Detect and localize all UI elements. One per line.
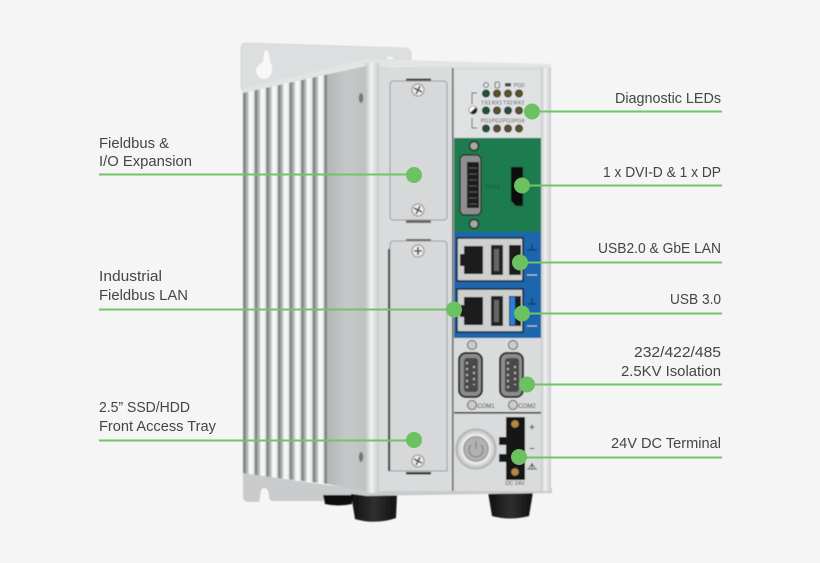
callout: DVI-D and DP: 1 x DVI-D & 1 x DP xyxy=(603,165,721,181)
LED labels: PG3 xyxy=(503,118,513,124)
callout: 232/422/485 isolation: 2.5KV Isolation xyxy=(621,364,721,380)
LED labels: TX1 xyxy=(481,100,491,106)
callout: USB2.0 and GbE LAN xyxy=(512,241,722,270)
serial COM panel: COM1 xyxy=(477,404,495,410)
power button xyxy=(456,429,496,469)
callout: SSD/HDD Front Access Tray: 2.5” SSD/HDD xyxy=(99,400,190,416)
top edge xyxy=(243,59,551,93)
LED labels: PG2 xyxy=(492,118,502,124)
right edge strip xyxy=(541,68,551,491)
DVI and DP panel: DVI-I xyxy=(485,184,500,191)
front foot right xyxy=(488,492,533,518)
rear foot xyxy=(323,495,352,506)
callout: Industrial Fieldbus LAN: Fieldbus LAN xyxy=(99,288,188,304)
bottom mounting tab xyxy=(243,474,366,502)
LEDs xyxy=(482,90,522,132)
callout: SSD/HDD Front Access Tray xyxy=(99,400,422,448)
callout: Fieldbus and I/O Expansion: I/O Expansion xyxy=(99,154,192,170)
LED panel xyxy=(454,70,541,137)
heat sink fins xyxy=(243,74,328,484)
callout: 232/422/485 isolation xyxy=(519,345,722,392)
LAN and USB panel xyxy=(454,232,541,338)
side panel xyxy=(328,62,366,492)
callout: Fieldbus and I/O Expansion: Fieldbus & xyxy=(99,136,169,152)
panel divider xyxy=(454,412,541,414)
callout: DVI-D and DP xyxy=(514,165,722,194)
callout: Industrial Fieldbus LAN xyxy=(99,269,462,318)
callout: Diagnostic LEDs xyxy=(524,91,722,120)
callout: 24V DC Terminal: 24V DC Terminal xyxy=(611,436,721,452)
DVI connector xyxy=(460,155,481,215)
side screw top xyxy=(359,93,363,103)
power and terminal panel: + xyxy=(529,422,535,432)
front corner xyxy=(366,63,379,493)
COM1 connector xyxy=(459,353,482,397)
callout: Fieldbus and I/O Expansion xyxy=(99,136,422,183)
callout: USB 3.0: USB 3.0 xyxy=(670,292,721,308)
panel icons xyxy=(527,244,537,304)
callout: 232/422/485 isolation: 232/422/485 xyxy=(634,345,721,361)
callout: 24V DC Terminal xyxy=(511,436,722,465)
LED labels: PG0 xyxy=(514,83,524,89)
callout: USB2.0 and GbE LAN: USB2.0 & GbE LAN xyxy=(598,241,721,257)
LED labels: TX2 xyxy=(503,100,513,106)
side screw bottom xyxy=(359,452,363,462)
LED labels: PG4 xyxy=(514,118,524,124)
DP port xyxy=(511,167,523,206)
mounting bracket xyxy=(241,43,411,92)
serial COM panel: COM2 xyxy=(518,404,536,410)
bracket and mode icon xyxy=(469,93,477,128)
DC terminal xyxy=(499,417,525,480)
power and terminal panel: DC 24V xyxy=(505,481,525,487)
DVI and DP panel xyxy=(454,138,541,232)
device: industrial computer xyxy=(241,43,552,522)
bottom edge xyxy=(243,473,552,496)
power and terminal panel: – xyxy=(529,443,535,453)
callout: Diagnostic LEDs: Diagnostic LEDs xyxy=(615,91,721,107)
callout: USB 3.0 xyxy=(514,292,722,322)
COM2 connector xyxy=(500,353,523,397)
LED labels: RX1 xyxy=(492,100,502,106)
port block upper xyxy=(457,238,523,281)
separator column xyxy=(452,68,454,491)
expansion cover plate xyxy=(390,78,447,223)
callout: Industrial Fieldbus LAN: Industrial xyxy=(99,269,162,285)
power and terminal panel xyxy=(454,414,541,487)
front foot left xyxy=(351,494,397,522)
port block lower xyxy=(457,289,523,332)
LED labels xyxy=(481,82,524,124)
front face xyxy=(379,67,551,491)
LED labels: PG1 xyxy=(481,118,491,124)
LED labels: RX2 xyxy=(514,100,524,106)
serial COM panel xyxy=(454,338,541,412)
SSD tray plate xyxy=(388,239,447,474)
callout: SSD/HDD Front Access Tray: Front Access Tray xyxy=(99,419,217,435)
